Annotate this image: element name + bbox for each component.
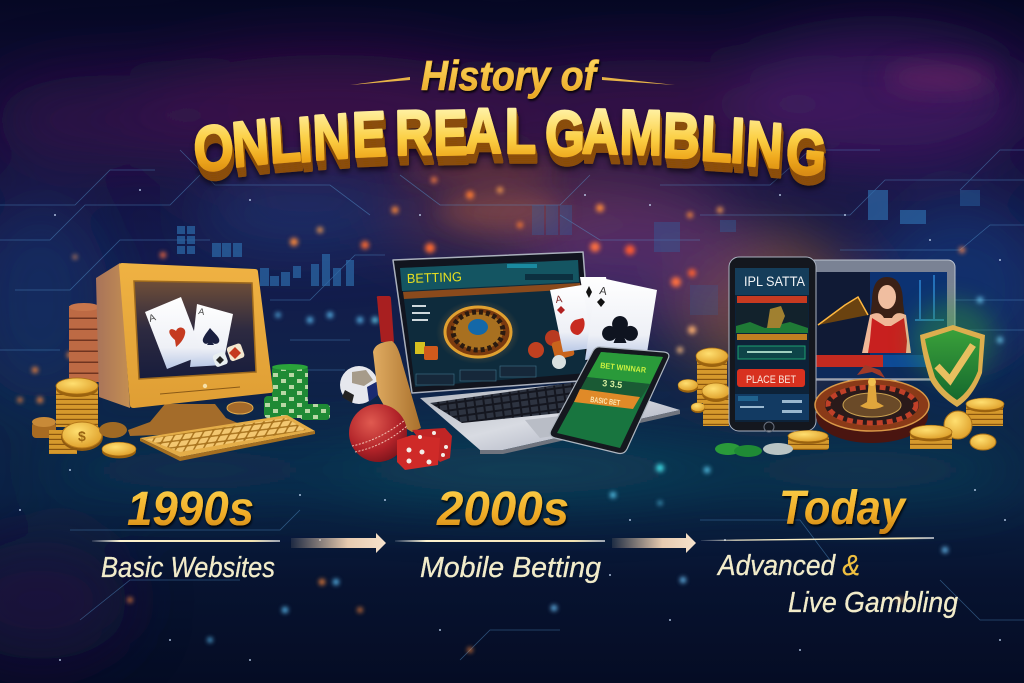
subtitle: History of: History of	[421, 52, 600, 99]
milestone: 2000s	[395, 483, 605, 584]
security shield with check	[911, 300, 995, 407]
green chip stack	[264, 364, 330, 420]
roulette on screen	[436, 300, 520, 364]
foreground coins	[788, 398, 1004, 450]
milestone: today: Today	[779, 482, 907, 535]
milestone: 2000s: Mobile Betting	[420, 552, 601, 584]
coin behind monitor	[227, 402, 253, 414]
smartphone: betting app: BET WINNAR	[600, 361, 647, 375]
milestone: 2000s: 2000s	[436, 483, 569, 536]
main heading: Online Real Gambling: ONLINE REAL GAMBLING	[191, 97, 828, 191]
era 1990s illustration: retro computer and coins	[32, 263, 330, 461]
arrow: 1990s to 2000s	[291, 533, 386, 553]
background: star specks	[19, 189, 1006, 661]
betting site name: BETTING	[407, 269, 462, 286]
screen playing cards: A	[148, 312, 158, 325]
place bet button: PLACE BET	[746, 374, 796, 386]
milestone: today: Live Gambling	[788, 587, 958, 619]
title block	[191, 52, 828, 191]
tablet with live dealer	[805, 260, 955, 380]
smartphone: betting app: 3 3.5	[602, 378, 623, 390]
coin stacks behind phone	[678, 348, 730, 426]
monitor stand	[128, 404, 240, 436]
smartphone: IPL Satta app	[729, 257, 816, 432]
timeline	[92, 482, 958, 619]
background: blue data squares	[177, 190, 980, 315]
era 2000s illustration: laptop, cards, phone and sports items	[340, 252, 680, 470]
arrow: 2000s to today	[612, 533, 696, 553]
milestone: 1990s	[92, 483, 280, 584]
milestone: 1990s: Basic Websites	[101, 552, 275, 584]
gold coin stacks: $	[78, 428, 86, 444]
keyboard	[140, 415, 315, 461]
site tiles	[412, 305, 575, 385]
green and white chips	[715, 443, 793, 457]
smartphone: betting app: BASIC BET	[590, 395, 621, 408]
era today illustration: phone, tablet, roulette and shield	[678, 257, 1004, 457]
milestone: today: Advanced &	[716, 550, 860, 582]
screen playing cards	[145, 297, 245, 369]
laptop screen	[393, 252, 593, 393]
playing cards	[550, 277, 657, 360]
cricket bat	[373, 296, 421, 432]
background: circuit lines and data blocks	[0, 150, 1024, 660]
subtitle: History of	[350, 52, 675, 99]
cricket ball	[349, 404, 407, 462]
place bet button	[737, 369, 805, 387]
laptop base	[420, 382, 680, 454]
playing cards: A	[599, 285, 608, 298]
screen playing cards: A	[198, 306, 205, 317]
milestone: 1990s: 1990s	[127, 483, 254, 536]
roulette wheel	[815, 365, 929, 443]
smartphone: IPL Satta app: IPL SATTA	[744, 273, 806, 289]
milestone: today	[701, 482, 958, 619]
gold coin stacks	[32, 378, 136, 458]
soccer ball	[340, 366, 378, 404]
monitor casing	[96, 263, 273, 408]
brown chip stack	[69, 303, 99, 382]
smartphone: betting app	[550, 347, 669, 454]
dealer figure	[862, 277, 911, 353]
playing cards: A	[555, 294, 563, 306]
background: glowing lights	[18, 177, 1003, 652]
red dice	[397, 428, 452, 470]
